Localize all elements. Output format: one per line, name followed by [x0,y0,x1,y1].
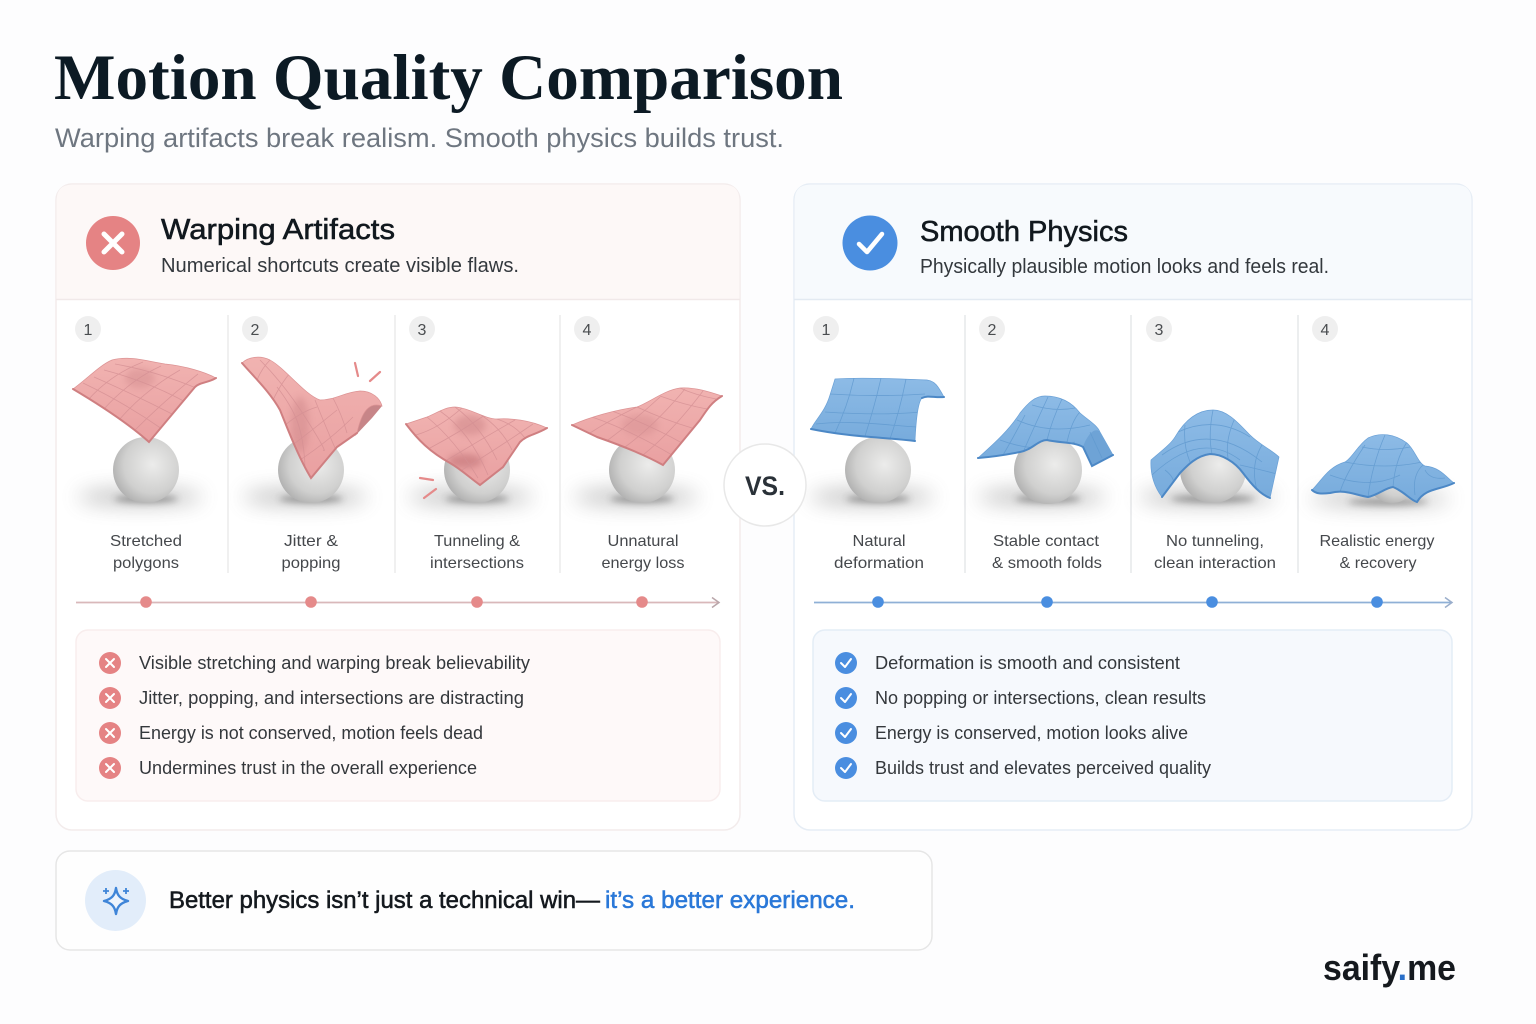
list item 4: Builds trust and elevates perceived quality [875,758,1211,778]
step 3: tunneling and intersections [406,316,547,572]
step 2: jitter and popping [242,316,382,572]
step 2: stable contact and smooth folds: & smooth folds [992,555,1102,572]
step 3: no tunneling, clean interaction: clean interaction [1154,555,1276,572]
spark marks [355,363,380,381]
list item 4: Undermines trust in the overall experience [139,758,477,778]
icon: blue check [842,216,898,270]
callout text: Better physics isn’t just a technical win— [169,887,600,914]
step 4: unnatural energy loss: Unnatural [608,533,678,550]
step 2: jitter and popping: Jitter & [284,533,338,550]
panel header: smooth physics [794,185,1472,300]
step 2: stable contact and smooth folds: 2 [988,322,997,339]
heading: warping artifacts: Warping Artifacts [161,214,395,246]
timeline: warping [76,596,719,608]
list item 3: Energy is conserved, motion looks alive [875,723,1188,743]
list item 1: Visible stretching and warping break believability [139,653,530,673]
step 1: natural deformation: 1 [822,322,831,339]
step 3: no tunneling, clean interaction [1139,316,1279,572]
list item 2: Jitter, popping, and intersections are distracting [139,688,524,708]
step 4: realistic energy and recovery: Realistic energy [1320,533,1434,550]
timeline: smooth [814,596,1452,608]
panel header: warping artifacts [56,185,740,300]
step 1: stretched polygons: 1 [84,322,93,339]
step 1: natural deformation [810,316,944,572]
list box: smooth benefits [813,630,1452,801]
step 4: unnatural energy loss: energy loss [602,555,684,572]
step 4: realistic energy and recovery [1310,316,1454,572]
step 2: stable contact and smooth folds [978,316,1113,572]
spark marks [420,478,436,498]
step 2: jitter and popping: 2 [251,322,260,339]
step 1: natural deformation: deformation [834,555,924,572]
step 1: stretched polygons: polygons [113,555,179,572]
step 4: realistic energy and recovery: 4 [1321,322,1330,339]
icon: red X [86,216,140,270]
step 4: unnatural energy loss: 4 [583,322,592,339]
header description: Numerical shortcuts create visible flaws. [161,255,519,277]
step 3: tunneling and intersections: intersections [430,555,524,572]
title: Motion Quality Comparison [54,42,843,114]
step 3: tunneling and intersections: 3 [418,322,427,339]
logo: saify.me: saify.me [1323,947,1456,988]
icon: sparkle [85,870,146,931]
step 4: realistic energy and recovery: & recovery [1340,555,1416,572]
step 1: stretched polygons [73,316,216,572]
step 1: stretched polygons: Stretched [110,533,182,550]
list item 1: Deformation is smooth and consistent [875,653,1180,673]
step 3: no tunneling, clean interaction: 3 [1155,322,1164,339]
heading: smooth physics: Smooth Physics [920,216,1128,248]
step 3: tunneling and intersections: Tunneling & [434,533,520,550]
step 4: unnatural energy loss [572,316,722,572]
list item 3: Energy is not conserved, motion feels dead [139,723,483,743]
subtitle: Warping artifacts break realism. Smooth physics builds trust. [55,123,784,153]
callout highlight: it’s a better experience. [605,887,855,914]
header description: Physically plausible motion looks and feels real. [920,256,1329,278]
list item 2: No popping or intersections, clean results [875,688,1206,708]
VS badge [724,444,806,526]
step 2: stable contact and smooth folds: Stable contact [993,533,1100,550]
step 2: jitter and popping: popping [282,555,340,572]
list box: warping drawbacks [76,630,720,801]
panel: smooth physics [794,184,1472,830]
VS badge: VS. [745,471,785,501]
panel: warping artifacts [56,184,740,830]
callout: takeaway [56,851,932,950]
step 3: no tunneling, clean interaction: No tunneling, [1166,533,1264,550]
step 1: natural deformation: Natural [852,533,906,550]
